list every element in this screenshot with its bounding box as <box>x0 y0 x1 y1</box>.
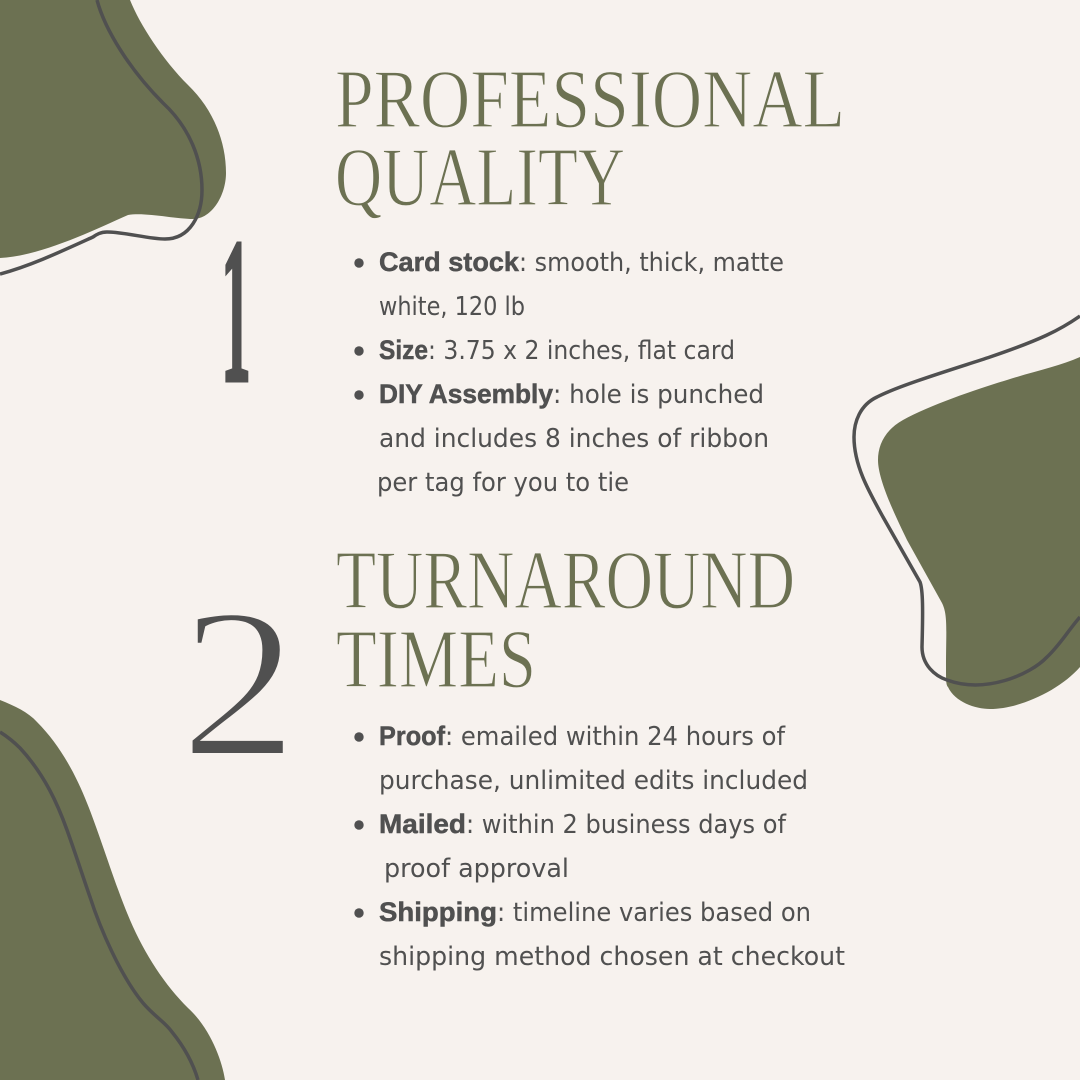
bullet: proof: Proof <box>379 721 446 751</box>
number 2: 2 <box>180 565 298 802</box>
bullet: proof <box>354 721 808 796</box>
bullet: mailed <box>354 809 787 884</box>
infographic canvas: 1 <box>221 196 251 427</box>
bullet: size: : 3.75 x 2 inches, flat card <box>428 336 735 366</box>
bullet: mailed: Mailed <box>379 809 466 839</box>
heading: turnaround times: TIMES <box>336 613 536 706</box>
bullet: diy assembly: and includes 8 inches of ribbon <box>379 424 769 454</box>
heading: professional quality <box>335 53 845 224</box>
bullet: size: Size <box>379 335 428 365</box>
bullet: mailed: proof approval <box>384 854 569 884</box>
blob: bottom left <box>0 700 225 1080</box>
bullet: diy assembly: : hole is punched <box>553 380 764 410</box>
bullet: diy assembly <box>354 379 769 498</box>
heading: professional quality: PROFESSIONAL <box>335 53 845 146</box>
bullet: card stock: white, 120 lb <box>379 292 525 322</box>
list: professional quality details <box>354 247 784 498</box>
bullet: shipping: shipping method chosen at checkout <box>379 942 845 972</box>
bullet: card stock <box>354 247 784 322</box>
blob: top left <box>0 0 226 274</box>
heading: professional quality: QUALITY <box>335 131 625 224</box>
bullet: diy assembly: per tag for you to tie <box>377 468 629 498</box>
bullet: card stock: : smooth, thick, matte <box>519 248 784 278</box>
bullet: card stock: Card stock <box>379 247 520 277</box>
list: turnaround details <box>354 721 845 972</box>
blob: right <box>854 316 1080 709</box>
heading: turnaround times <box>336 534 795 706</box>
heading: turnaround times: TURNAROUND <box>336 534 795 627</box>
bullet: shipping: Shipping <box>379 897 497 927</box>
bullet: proof: purchase, unlimited edits included <box>379 766 808 796</box>
bullet: diy assembly: DIY Assembly <box>379 379 553 409</box>
bullet: shipping <box>354 897 845 972</box>
bullet: shipping: : timeline varies based on <box>497 898 811 928</box>
bullet: mailed: : within 2 business days of <box>466 810 787 840</box>
bullet: proof: : emailed within 24 hours of <box>445 722 786 752</box>
